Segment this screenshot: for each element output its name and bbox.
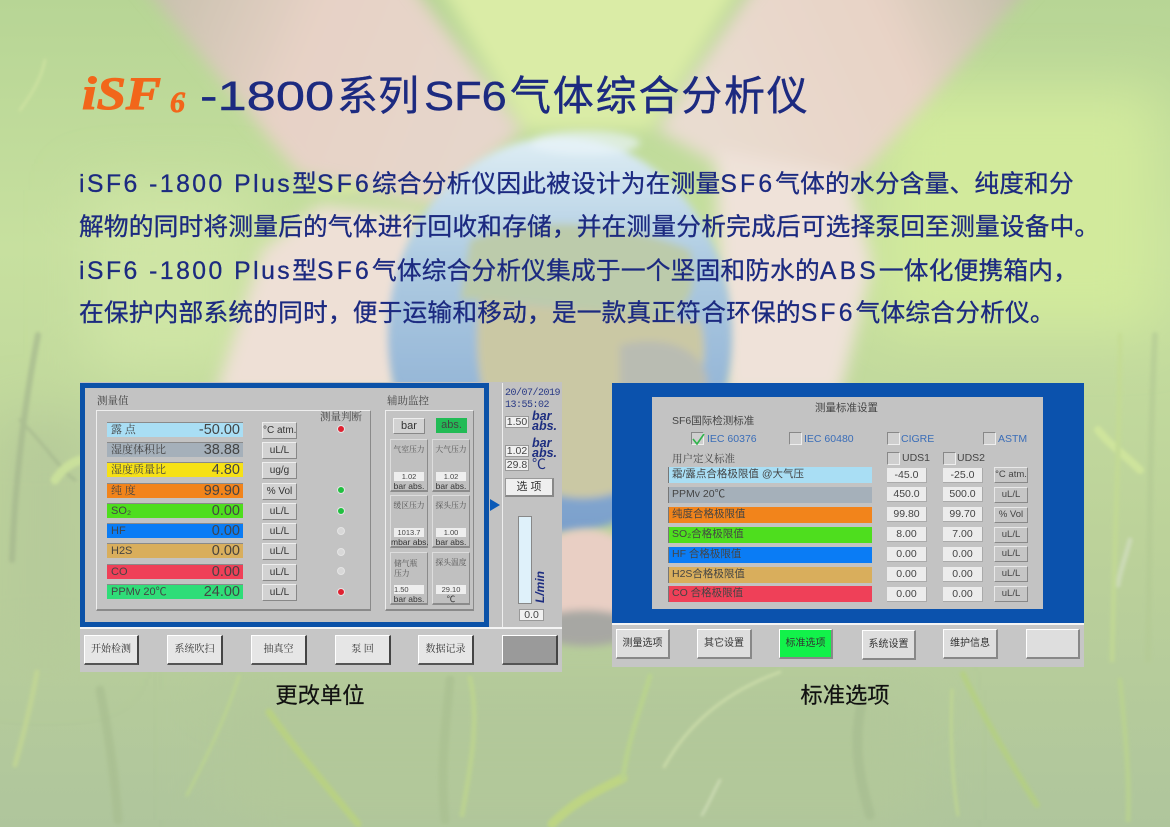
cell: gas bottle pressure: bar abs.	[394, 594, 424, 604]
button: start: 开始检测	[91, 644, 131, 655]
unit button	[262, 503, 297, 520]
cell: probe temperature: 29.10	[442, 585, 460, 594]
row: PPMv: PPMv 20℃	[111, 586, 167, 598]
unit button: °C atm.	[263, 425, 296, 436]
row: HF limit: HF 合格极限值	[672, 548, 741, 560]
panel: standard options screen	[612, 383, 1084, 667]
checkbox	[983, 432, 996, 445]
button: standard options active: 标准选项	[786, 638, 826, 649]
LED green	[337, 486, 345, 494]
value UDS1	[887, 547, 927, 562]
cell: gas bottle pressure: 1.50	[394, 585, 409, 594]
value UDS1: 0.00	[896, 568, 917, 580]
value UDS1: 0.00	[896, 548, 917, 560]
button: pump back	[335, 635, 391, 665]
row: purity limit	[668, 507, 872, 523]
flow gauge	[518, 516, 532, 604]
button: purge: 系统吹扫	[174, 644, 214, 655]
heading: measured values: 测量值	[97, 396, 128, 407]
unit: bar abs	[532, 409, 557, 432]
cell: probe temperature: ℃	[447, 594, 455, 604]
heading: auxiliary monitoring: 辅助监控	[387, 396, 429, 407]
value UDS1	[887, 487, 927, 502]
heading: judgement: 测量判断	[320, 412, 362, 423]
logo: iSF6: 6	[170, 86, 185, 119]
heading text: 系列	[337, 73, 419, 119]
unit: °C atm.	[995, 469, 1027, 480]
heading: SF6 international standards: SF6国际检测标准	[672, 415, 754, 427]
value UDS1: -45.0	[895, 469, 918, 481]
value UDS1	[887, 507, 927, 522]
blue frame	[612, 383, 1084, 623]
LED off	[337, 527, 345, 535]
unit	[994, 467, 1028, 483]
cell: buffer pressure: mbar abs.	[391, 537, 429, 547]
cell: atmospheric pressure: 大气压力	[435, 445, 467, 454]
value UDS2: 500.0	[949, 488, 976, 500]
button: other settings: 其它设置	[704, 638, 744, 649]
unit button	[262, 584, 297, 601]
row: HF: HF	[111, 525, 126, 537]
heading text: 气体综合分析仪	[510, 73, 810, 119]
cell: chamber pressure: bar abs.	[394, 481, 424, 491]
button: maintenance info	[943, 629, 998, 659]
grey settings panel	[652, 397, 1043, 609]
auxiliary sub-panel	[385, 410, 474, 611]
row: mass humidity: 4.80	[212, 462, 240, 478]
unit: bar abs: bar	[532, 409, 551, 423]
unit: uL/L	[1002, 568, 1020, 579]
button: pump back: 泵 回	[351, 644, 374, 655]
cell: probe pressure: 探头压力	[435, 501, 467, 510]
button: vacuum	[251, 635, 307, 665]
cell: gas bottle pressure: 压力	[394, 569, 410, 578]
unit button: uL/L	[270, 526, 289, 537]
divider	[502, 383, 503, 627]
button: system settings: 系统设置	[868, 639, 908, 650]
unit button: uL/L	[270, 567, 289, 578]
title	[82, 68, 810, 120]
label: UDS2	[957, 452, 985, 464]
row: mass humidity: 湿度质量比	[111, 464, 166, 476]
bottom bar	[80, 627, 562, 672]
row: purity: 纯 度	[111, 485, 136, 497]
unit: uL/L	[1002, 489, 1020, 500]
row: dew point limit	[668, 467, 872, 483]
row: CO: 0.00	[212, 564, 240, 580]
row: H2S	[107, 543, 243, 558]
value UDS2: 0.00	[952, 568, 973, 580]
value UDS1	[887, 567, 927, 582]
button: start	[84, 635, 139, 665]
row: CO limit: CO 合格极限值	[672, 587, 743, 599]
row: CO limit	[668, 586, 872, 602]
flow unit: L/min	[533, 571, 547, 603]
unit	[994, 527, 1028, 543]
unit: bar abs: abs.	[532, 446, 557, 460]
label: UDS1	[902, 452, 930, 464]
unit button: uL/L	[270, 506, 289, 517]
heading: standard settings: 测量标准设置	[815, 402, 878, 414]
row: volume humidity	[107, 442, 243, 457]
row: dew point: 露 点	[111, 424, 136, 436]
label: CIGRE	[901, 433, 934, 445]
value UDS1: 0.00	[896, 588, 917, 600]
value UDS2: 7.00	[952, 528, 973, 540]
pressure readout 2: 1.02	[507, 445, 527, 457]
heading text: -1800	[200, 73, 334, 119]
button: purge	[167, 635, 223, 665]
unit: uL/L	[1002, 529, 1020, 540]
abs button: abs.	[441, 419, 462, 431]
row: purity limit: 纯度合格极限值	[672, 508, 746, 520]
heading text	[200, 73, 810, 119]
cell: atmospheric pressure	[432, 439, 470, 492]
unit: uL/L	[1002, 588, 1020, 599]
value UDS1: 450.0	[893, 488, 920, 500]
row: volume humidity: 38.88	[204, 442, 240, 458]
row: H2S limit: H2S合格极限值	[672, 568, 745, 580]
button: blank	[1026, 629, 1080, 659]
row: purity	[107, 483, 243, 498]
caption: standard options: 标准选项	[800, 683, 890, 708]
value UDS1	[887, 468, 927, 483]
value UDS1	[887, 587, 927, 602]
value UDS2	[943, 487, 983, 502]
row: purity: 99.90	[204, 483, 240, 499]
unit: bar abs: abs.	[532, 418, 557, 432]
row: volume humidity: 湿度体积比	[111, 444, 166, 456]
unit button	[262, 564, 297, 581]
row: HF: 0.00	[212, 523, 240, 539]
temperature readout: 29.8	[507, 459, 527, 471]
text line 1: iSF6 -1800 Plus型SF6综合分析仪因此被设计为在测量SF6气体的水分含量、纯度和分	[79, 171, 1074, 198]
button: maintenance info: 维护信息	[950, 638, 990, 649]
cell: probe pressure: 1.00	[444, 528, 458, 537]
row: dew point	[107, 422, 243, 437]
unit: celsius: ℃	[532, 456, 546, 472]
cell: buffer pressure: 缓区压力	[393, 501, 425, 510]
unit	[994, 546, 1028, 562]
unit button	[262, 523, 297, 540]
value UDS2: 99.70	[949, 508, 976, 520]
checkbox checked	[691, 432, 704, 445]
heading: user defined standard: 用户定义标准	[672, 454, 735, 465]
cell: chamber pressure	[390, 439, 428, 492]
value UDS2	[943, 527, 983, 542]
cell: probe temperature	[432, 552, 470, 605]
cell: buffer pressure	[390, 495, 428, 548]
row: dew point limit: 霜/露点合格极限值 @大气压	[672, 468, 804, 480]
value UDS1: 99.80	[893, 508, 920, 520]
intro text block	[79, 171, 1099, 327]
cell: atmospheric pressure: 1.02	[444, 472, 458, 481]
bar button: bar	[401, 420, 417, 432]
date and time: 20/07/2019	[505, 388, 560, 399]
button: other settings	[697, 629, 752, 659]
arrow	[490, 499, 500, 511]
unit button: uL/L	[270, 445, 289, 456]
value UDS2: 0.00	[952, 588, 973, 600]
unit button	[262, 483, 297, 500]
unit button	[262, 422, 297, 439]
row: SO2: SO₂	[111, 505, 131, 517]
unit button	[262, 442, 297, 459]
blue frame	[80, 383, 489, 628]
button: measurement options: 测量选项	[622, 638, 662, 649]
abs button	[436, 418, 467, 433]
cell: probe temperature: 探头温度	[435, 558, 467, 567]
flow value: 0.0	[524, 609, 539, 621]
button: measurement options	[616, 629, 670, 659]
unit button: uL/L	[270, 546, 289, 557]
unit: uL/L	[1002, 548, 1020, 559]
LED red	[337, 425, 345, 433]
row: dew point: -50.00	[199, 422, 240, 438]
heading text: SF6	[424, 73, 507, 119]
value UDS2	[943, 507, 983, 522]
row: H2S: H2S	[111, 545, 132, 557]
LED off	[337, 548, 345, 556]
unit button	[262, 462, 297, 479]
caption: change unit: 更改单位	[275, 683, 365, 708]
row: SO2 limit	[668, 527, 872, 543]
row: CO	[107, 564, 243, 579]
checkbox	[887, 432, 900, 445]
pressure readout 1: 1.50	[507, 416, 527, 428]
row: PPMv	[107, 584, 243, 599]
cell: chamber pressure: 1.02	[402, 472, 416, 481]
row: SO2	[107, 503, 243, 518]
button: data log: 数据记录	[426, 644, 466, 655]
row: PPMv	[668, 487, 872, 503]
value UDS1: 8.00	[896, 528, 917, 540]
unit	[994, 566, 1028, 582]
row: PPMv: 24.00	[204, 584, 240, 600]
row: HF limit	[668, 547, 872, 563]
row: mass humidity	[107, 462, 243, 477]
cell: probe pressure: bar abs.	[436, 537, 466, 547]
cell: buffer pressure: 1013.7	[398, 528, 420, 537]
row: SO2: 0.00	[212, 503, 240, 519]
unit button	[262, 543, 297, 560]
measured values sub-panel	[96, 410, 371, 611]
button: system settings	[862, 630, 916, 660]
value UDS2	[943, 547, 983, 562]
value UDS2	[943, 468, 983, 483]
row: SO2 limit: SO₂合格极限值	[672, 528, 744, 540]
row: PPMv: PPMv 20℃	[672, 488, 725, 500]
date and time: 13:55:02	[505, 400, 549, 411]
bar button	[393, 418, 425, 434]
date and time	[505, 388, 560, 411]
label: IEC 60376	[707, 433, 757, 445]
panel: measurement screen	[80, 382, 562, 672]
text line 2: 解物的同时将测量后的气体进行回收和存储，并在测量分析完成后可选择泵回至测量设备中。	[79, 214, 1099, 241]
unit	[994, 507, 1028, 523]
screen frame	[80, 382, 562, 672]
unit button: uL/L	[270, 587, 289, 598]
unit button: % Vol	[267, 486, 292, 497]
unit: bar abs	[532, 436, 557, 460]
checkbox UDS1	[887, 452, 900, 465]
label: IEC 60480	[804, 433, 854, 445]
unit	[994, 487, 1028, 503]
cell: chamber pressure: 气室压力	[393, 445, 425, 454]
unit button: ug/g	[270, 465, 289, 476]
flow value	[519, 609, 544, 621]
unit	[994, 586, 1028, 602]
options button	[505, 478, 554, 497]
row: H2S: 0.00	[212, 543, 240, 559]
value UDS2	[943, 567, 983, 582]
text line 4: 在保护内部系统的同时，便于运输和移动，是一款真正符合环保的SF6气体综合分析仪。	[79, 300, 1055, 327]
button: vacuum: 抽真空	[264, 644, 294, 655]
row: HF	[107, 523, 243, 538]
LED red	[337, 588, 345, 596]
cell: gas bottle pressure: 储气瓶	[394, 559, 417, 568]
cell: gas bottle pressure	[390, 552, 428, 605]
checkbox	[789, 432, 802, 445]
inner grey panel	[85, 388, 484, 622]
unit: % Vol	[999, 509, 1023, 520]
logo: iSF6: iSF	[82, 68, 161, 120]
value UDS2: 0.00	[952, 548, 973, 560]
button: blank	[502, 635, 558, 665]
LED green	[337, 507, 345, 515]
button: data log	[418, 635, 474, 665]
value UDS2	[943, 587, 983, 602]
options button: 选 项	[516, 481, 542, 493]
cell: atmospheric pressure: bar abs.	[436, 481, 466, 491]
label: ASTM	[998, 433, 1027, 445]
LED off	[337, 567, 345, 575]
cell: probe pressure	[432, 495, 470, 548]
value UDS2: -25.0	[951, 469, 974, 481]
value UDS1	[887, 527, 927, 542]
bottom bar	[612, 623, 1084, 667]
unit: bar abs: bar	[532, 436, 551, 450]
row: H2S limit	[668, 567, 872, 583]
text line 3: iSF6 -1800 Plus型SF6气体综合分析仪集成于一个坚固和防水的ABS一体化便携箱内，	[79, 258, 1078, 285]
row: CO: CO	[111, 566, 128, 578]
checkbox UDS2	[943, 452, 956, 465]
button: standard options active	[779, 629, 833, 659]
